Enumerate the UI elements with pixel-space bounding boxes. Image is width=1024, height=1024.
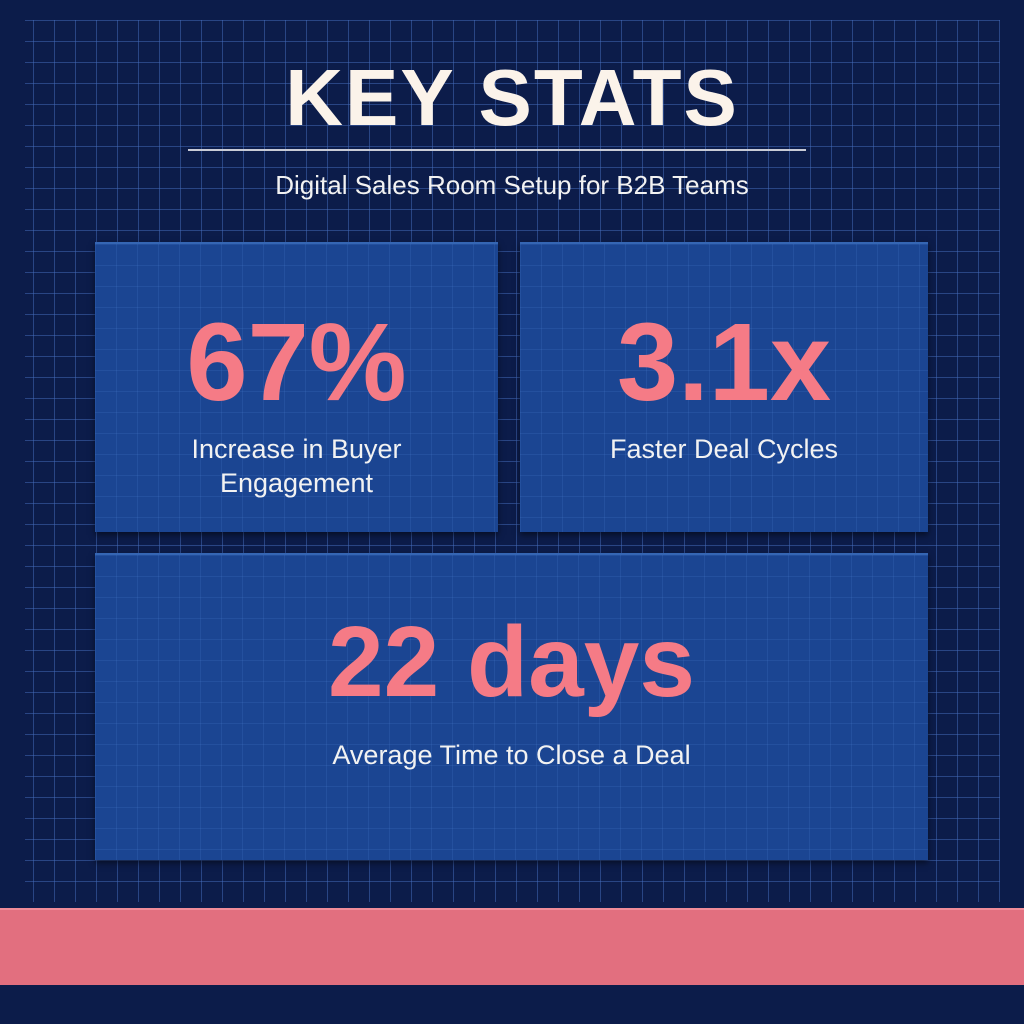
panel: deal cycles bbox=[520, 242, 928, 532]
label engagement: Engagement bbox=[220, 468, 373, 498]
label engagement bbox=[191, 434, 402, 498]
footer band bbox=[0, 908, 1024, 985]
panel: time to close bbox=[95, 553, 928, 860]
panel: engagement bbox=[95, 242, 498, 532]
subtitle: Digital Sales Room Setup for B2B Teams bbox=[275, 170, 749, 200]
stat 3.1x: 3.1x bbox=[617, 301, 831, 424]
stat 67%: 67% bbox=[186, 301, 407, 424]
label close: Average Time to Close a Deal bbox=[332, 740, 691, 770]
title: KEY STATS bbox=[285, 53, 739, 142]
stat 22 days: 22 days bbox=[328, 606, 695, 718]
label deal cycles: Faster Deal Cycles bbox=[610, 434, 838, 464]
label engagement: Increase in Buyer bbox=[191, 434, 402, 464]
